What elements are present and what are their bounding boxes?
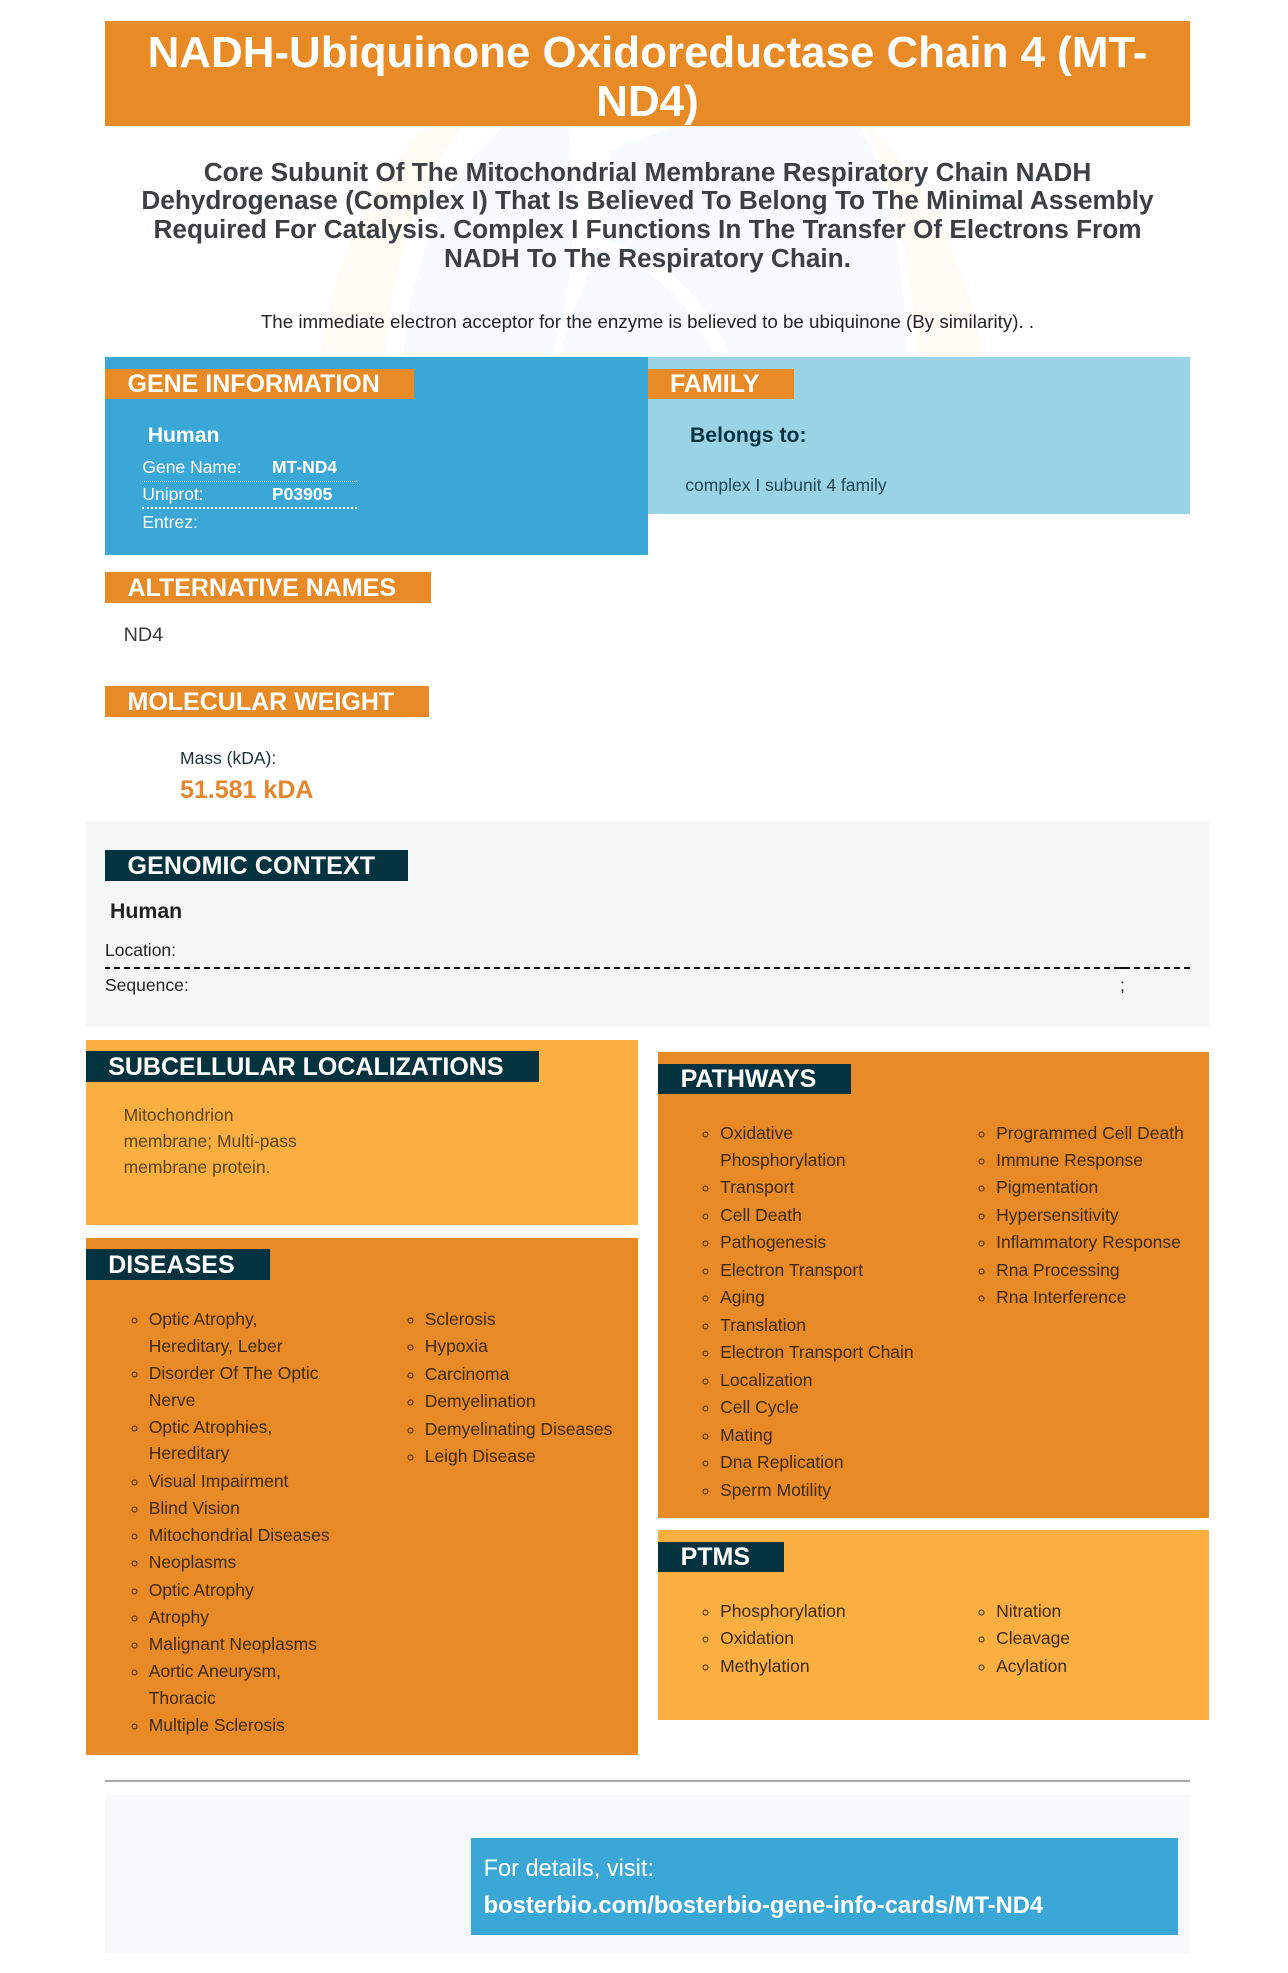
pathway list column 1: Cell Cycle bbox=[720, 1397, 799, 1417]
heading: subcellular localizations: SUBCELLULAR LOCALIZATIONS bbox=[108, 1053, 504, 1081]
family name: complex I subunit 4 family bbox=[685, 475, 887, 495]
gene name row: MT-ND4 bbox=[272, 457, 337, 477]
title banner: NADH-Ubiquinone Oxidoreductase Chain 4 (MT- bbox=[148, 28, 1147, 76]
panel: alternative names bbox=[105, 572, 431, 646]
disease list column 2: Sclerosis bbox=[425, 1309, 496, 1329]
details url: bosterbio.com/bosterbio-gene-info-cards/MT-ND4 bbox=[484, 1892, 1043, 1919]
disease list column 1: Hereditary bbox=[149, 1443, 229, 1463]
uniprot row: Uniprot: bbox=[142, 484, 204, 504]
uniprot row bbox=[142, 482, 357, 509]
ptm list column 2: Cleavage bbox=[996, 1628, 1070, 1648]
pathway list column 1: Electron Transport Chain bbox=[720, 1342, 914, 1362]
disease list column 1: Neoplasms bbox=[149, 1552, 236, 1572]
disease list column 1: Malignant Neoplasms bbox=[149, 1634, 317, 1654]
heading: molecular weight: MOLECULAR WEIGHT bbox=[128, 688, 394, 716]
panel: diseases bbox=[86, 1238, 638, 1755]
disease list column 1: Optic Atrophies, bbox=[149, 1417, 272, 1437]
ptm list column 2: Nitration bbox=[996, 1600, 1061, 1620]
heading: alternative names: ALTERNATIVE NAMES bbox=[128, 574, 396, 602]
disease list column 1: Atrophy bbox=[149, 1607, 209, 1627]
pathway list column 1: Oxidative bbox=[720, 1122, 793, 1142]
belongs to label: Belongs to: bbox=[690, 424, 807, 446]
pathway list column 2: Programmed Cell Death bbox=[996, 1122, 1184, 1142]
details label: For details, visit: bbox=[484, 1856, 654, 1882]
localization text: Mitochondrion bbox=[124, 1105, 234, 1125]
pathway list column 2: Pigmentation bbox=[996, 1177, 1098, 1197]
pathway list column 1: Phosphorylation bbox=[720, 1150, 846, 1170]
species label: Human bbox=[110, 899, 182, 923]
panel: footer bbox=[105, 1795, 1190, 1953]
disease list column 1: Disorder Of The Optic bbox=[149, 1363, 319, 1383]
subtitle description: Required For Catalysis. Complex I Functions In The Transfer Of Electrons From bbox=[153, 214, 1142, 244]
disease list column 1: Aortic Aneurysm, bbox=[149, 1661, 281, 1681]
disease list column 1: Thoracic bbox=[149, 1688, 216, 1708]
heading: pathways: PATHWAYS bbox=[681, 1065, 816, 1093]
pathway list column 1: Sperm Motility bbox=[720, 1480, 831, 1500]
disease list column 1: Visual Impairment bbox=[149, 1471, 288, 1491]
pathway list column 1: Translation bbox=[720, 1315, 806, 1335]
pathway list column 1: Electron Transport bbox=[720, 1260, 863, 1280]
disease list column 2 bbox=[408, 1309, 612, 1466]
callout: details link bbox=[471, 1838, 1178, 1935]
disease list column 1: Multiple Sclerosis bbox=[149, 1715, 285, 1735]
pathway list column 2: Immune Response bbox=[996, 1150, 1143, 1170]
heading: ptms bbox=[658, 1542, 784, 1572]
heading: diseases: DISEASES bbox=[108, 1251, 235, 1279]
ptm list column 2: Acylation bbox=[996, 1656, 1067, 1676]
pathway list column 2: Hypersensitivity bbox=[996, 1205, 1119, 1225]
disease list column 1: Optic Atrophy, bbox=[149, 1309, 257, 1329]
pathway list column 2: Rna Processing bbox=[996, 1260, 1120, 1280]
dashed separator bbox=[105, 967, 1190, 969]
localization text: membrane; Multi-pass bbox=[124, 1131, 297, 1151]
disease list column 2: Hypoxia bbox=[425, 1336, 488, 1356]
pathway list column 1: Dna Replication bbox=[720, 1452, 844, 1472]
title banner bbox=[105, 21, 1190, 126]
mass value: 51.581 kDA bbox=[180, 776, 313, 804]
heading: family bbox=[648, 369, 794, 399]
pathway list column 1: Pathogenesis bbox=[720, 1232, 826, 1252]
pathway list column 1 bbox=[702, 1122, 914, 1500]
panel: subcellular localizations bbox=[86, 1040, 638, 1225]
pathway list column 2: Rna Interference bbox=[996, 1287, 1126, 1307]
localization text bbox=[124, 1105, 297, 1177]
panel: gene information bbox=[105, 357, 648, 555]
sequence end mark: ; bbox=[1120, 975, 1125, 995]
disease list column 1: Mitochondrial Diseases bbox=[149, 1525, 330, 1545]
gene name row bbox=[142, 455, 357, 482]
pathway list column 1: Mating bbox=[720, 1425, 773, 1445]
localization text: membrane protein. bbox=[124, 1157, 270, 1177]
sequence row: Sequence: bbox=[105, 975, 189, 995]
title banner: ND4) bbox=[596, 77, 699, 126]
disease list column 2: Demyelinating Diseases bbox=[425, 1419, 612, 1439]
heading: family: FAMILY bbox=[670, 370, 759, 398]
panel: genomic context bbox=[86, 821, 1209, 1027]
heading: ptms: PTMS bbox=[681, 1543, 750, 1571]
heading: gene information: GENE INFORMATION bbox=[128, 370, 380, 398]
subtitle description: NADH To The Respiratory Chain. bbox=[444, 243, 851, 273]
ptm list column 1: Phosphorylation bbox=[720, 1600, 846, 1620]
mass label: Mass (kDA): bbox=[180, 748, 276, 768]
pathway list column 2: Inflammatory Response bbox=[996, 1232, 1181, 1252]
panel: molecular weight bbox=[105, 686, 429, 804]
entrez row: Entrez: bbox=[142, 512, 198, 532]
function note: The immediate electron acceptor for the enzyme is believed to be ubiquinone (By similarity). . bbox=[261, 311, 1034, 332]
disease list column 1 bbox=[132, 1309, 330, 1735]
heading: pathways bbox=[658, 1064, 851, 1094]
disease list column 2: Carcinoma bbox=[425, 1364, 509, 1384]
subtitle description: Core Subunit Of The Mitochondrial Membrane Respiratory Chain NADH bbox=[204, 156, 1091, 186]
disease list column 1: Nerve bbox=[149, 1390, 195, 1410]
subtitle description bbox=[141, 156, 1154, 273]
heading: diseases bbox=[86, 1249, 270, 1280]
heading: genomic context: GENOMIC CONTEXT bbox=[128, 852, 375, 880]
subtitle description: Dehydrogenase (Complex I) That Is Believed To Belong To The Minimal Assembly bbox=[141, 185, 1154, 215]
location row: Location: bbox=[105, 940, 176, 960]
disease list column 2: Demyelination bbox=[425, 1391, 536, 1411]
ptm list column 1: Methylation bbox=[720, 1656, 810, 1676]
pathway list column 2 bbox=[978, 1122, 1184, 1307]
disease list column 2: Leigh Disease bbox=[425, 1446, 536, 1466]
panel: ptms bbox=[658, 1530, 1209, 1720]
pathway list column 1: Transport bbox=[720, 1177, 794, 1197]
ptm list column 1: Oxidation bbox=[720, 1628, 794, 1648]
gene name row: Gene Name: bbox=[142, 457, 242, 477]
pathway list column 1: Localization bbox=[720, 1370, 813, 1390]
panel: family bbox=[648, 357, 1190, 514]
ptm list column 2 bbox=[978, 1600, 1070, 1676]
disease list column 1: Blind Vision bbox=[149, 1498, 240, 1518]
species label: Human bbox=[148, 424, 220, 446]
disease list column 1: Optic Atrophy bbox=[149, 1580, 254, 1600]
uniprot row: P03905 bbox=[272, 484, 332, 504]
alternative name value: ND4 bbox=[124, 624, 163, 646]
background logo watermark bbox=[320, 126, 982, 357]
pathway list column 1: Aging bbox=[720, 1287, 765, 1307]
panel: pathways bbox=[658, 1052, 1209, 1518]
ptm list column 1 bbox=[702, 1600, 846, 1676]
pathway list column 1: Cell Death bbox=[720, 1205, 802, 1225]
disease list column 1: Hereditary, Leber bbox=[149, 1336, 283, 1356]
